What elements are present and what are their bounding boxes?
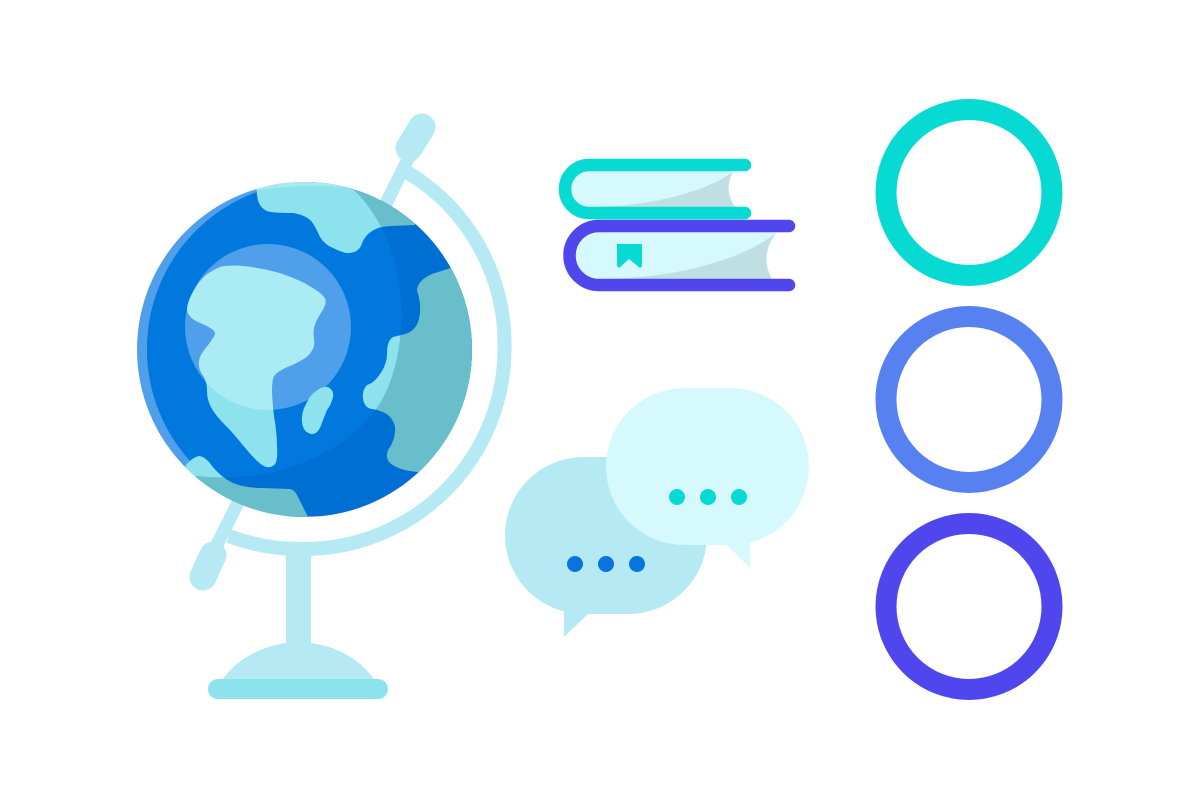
dome base	[220, 643, 377, 684]
bottom book	[570, 226, 789, 285]
rings column	[886, 110, 1052, 690]
stack of books	[565, 165, 789, 285]
island	[302, 387, 333, 434]
left rim highlight	[130, 175, 480, 525]
continent highlight	[187, 266, 326, 410]
blue ring	[886, 316, 1052, 482]
globe	[137, 182, 472, 517]
globe axis rod	[203, 127, 422, 577]
speech bubbles	[505, 388, 809, 637]
front bubble dots	[669, 489, 747, 505]
highlight circle	[185, 244, 351, 410]
lit ocean and land	[147, 182, 402, 478]
top book	[565, 165, 745, 213]
indigo ring	[886, 524, 1052, 690]
main continent	[187, 266, 326, 467]
back bubble	[505, 457, 707, 637]
meridian arc	[229, 172, 505, 549]
bookmark	[617, 244, 642, 268]
shaded ocean and land	[147, 170, 481, 530]
front bubble	[606, 388, 809, 568]
foot bar	[208, 679, 388, 699]
pole	[286, 548, 311, 648]
top rim light	[258, 182, 346, 190]
globe stand	[203, 127, 505, 699]
back bubble dots	[567, 556, 645, 572]
teal ring	[886, 110, 1052, 276]
illustration canvas	[137, 99, 1062, 700]
